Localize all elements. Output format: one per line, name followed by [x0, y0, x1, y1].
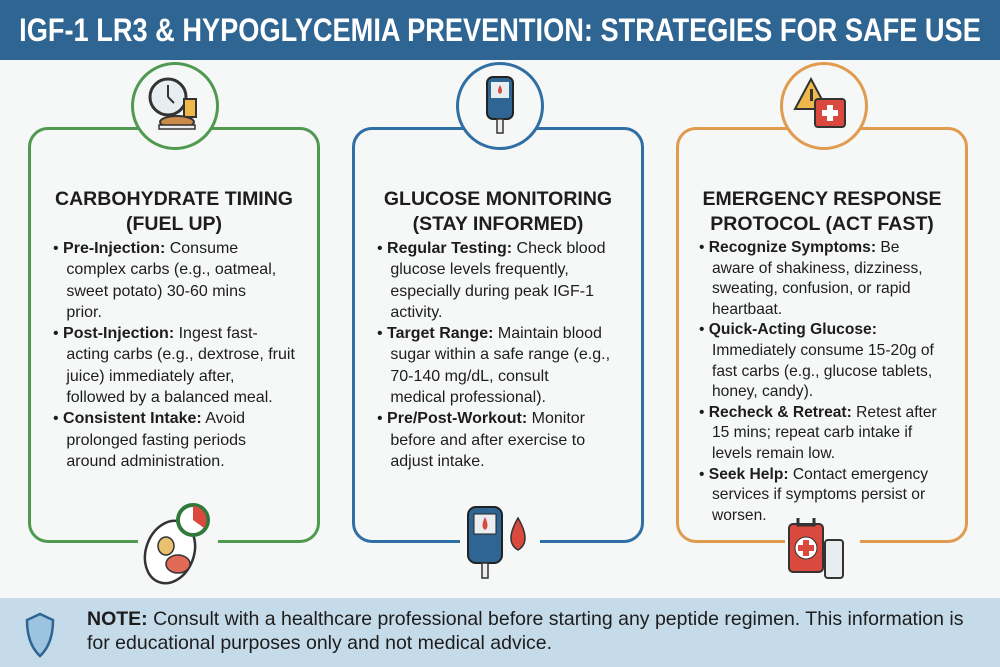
- bullet list: services if symptoms persist or: [712, 486, 925, 503]
- icon: shield: [26, 612, 54, 658]
- heading: GLUCOSE MONITORING: [384, 188, 612, 210]
- bullet list: • Target Range: Maintain blood: [377, 325, 602, 342]
- heading: CARBOHYDRATE TIMING: [55, 188, 293, 210]
- bullet list: 70-140 mg/dL, consult: [390, 368, 549, 385]
- bullet list: [699, 239, 937, 524]
- bullet list: honey, candy).: [712, 383, 813, 400]
- bullet list: acting carbs (e.g., dextrose, fruit: [66, 346, 295, 363]
- bullet list: [377, 240, 610, 470]
- bullet list: sweating, confusion, or rapid: [712, 280, 910, 297]
- bullet list: 15 mins; repeat carb intake if: [712, 424, 912, 441]
- bullet list: • Seek Help: Contact emergency: [699, 466, 928, 483]
- bullet list: activity.: [390, 304, 442, 321]
- bullet list: sweet potato) 30-60 mins: [66, 283, 246, 300]
- heading: (FUEL UP): [126, 213, 222, 235]
- bullet list: • Recheck & Retreat: Retest after: [699, 404, 937, 421]
- bullet list: juice) immediately after,: [66, 368, 234, 385]
- bullet list: • Regular Testing: Check blood: [377, 240, 605, 257]
- title: IGF-1 LR3 & HYPOGLYCEMIA PREVENTION: STRATEGIES FOR SAFE USE: [19, 12, 981, 48]
- bullet list: medical professional).: [390, 389, 546, 406]
- icon: first aid kit and phone: [785, 518, 860, 590]
- icon: glucose meter: [456, 62, 544, 150]
- note text: NOTE: Consult with a healthcare professional before starting any peptide regimen. This information is: [87, 608, 964, 630]
- title: [0, 0, 1000, 60]
- bullet list: prolonged fasting periods: [66, 432, 246, 449]
- heading: [702, 188, 942, 235]
- bullet list: • Pre/Post-Workout: Monitor: [377, 410, 585, 427]
- bullet list: followed by a balanced meal.: [66, 389, 273, 406]
- bullet list: complex carbs (e.g., oatmeal,: [66, 261, 276, 278]
- bullet list: adjust intake.: [390, 453, 485, 470]
- bullet list: • Post-Injection: Ingest fast-: [53, 325, 258, 342]
- bullet list: heartbaat.: [712, 301, 782, 318]
- heading: [55, 188, 293, 235]
- bullet list: aware of shakiness, dizziness,: [712, 260, 923, 277]
- heading: [384, 188, 612, 235]
- bullet list: [53, 240, 295, 470]
- heading: (STAY INFORMED): [413, 213, 583, 235]
- bullet list: • Quick-Acting Glucose:: [699, 321, 877, 338]
- bullet list: • Consistent Intake: Avoid: [53, 410, 245, 427]
- bullet list: sugar within a safe range (e.g.,: [390, 346, 610, 363]
- bullet list: • Pre-Injection: Consume: [53, 240, 238, 257]
- icon: glucose meter with drop: [460, 500, 540, 590]
- panel: carbohydrate timing: [28, 127, 320, 543]
- bullet list: before and after exercise to: [390, 432, 585, 449]
- bullet list: fast carbs (e.g., glucose tablets,: [712, 363, 932, 380]
- bullet list: glucose levels frequently,: [390, 261, 569, 278]
- icon: warning and first aid: [780, 62, 868, 150]
- heading: EMERGENCY RESPONSE: [702, 188, 942, 210]
- note text: [87, 608, 964, 654]
- bullet list: prior.: [66, 304, 102, 321]
- heading: PROTOCOL (ACT FAST): [710, 213, 934, 235]
- bullet list: levels remain low.: [712, 445, 835, 462]
- icon: plate and stopwatch: [138, 500, 218, 590]
- footer note: [0, 598, 1000, 667]
- bullet list: • Recognize Symptoms: Be: [699, 239, 899, 256]
- bullet list: around administration.: [66, 453, 225, 470]
- panel: glucose monitoring: [352, 127, 644, 543]
- note text: for educational purposes only and not medical advice.: [87, 632, 552, 654]
- bullet list: Immediately consume 15-20g of: [712, 342, 934, 359]
- bullet list: especially during peak IGF-1: [390, 283, 594, 300]
- bullet list: worsen.: [712, 507, 767, 524]
- icon: clock and meal: [131, 62, 219, 150]
- panel: emergency response: [676, 127, 968, 543]
